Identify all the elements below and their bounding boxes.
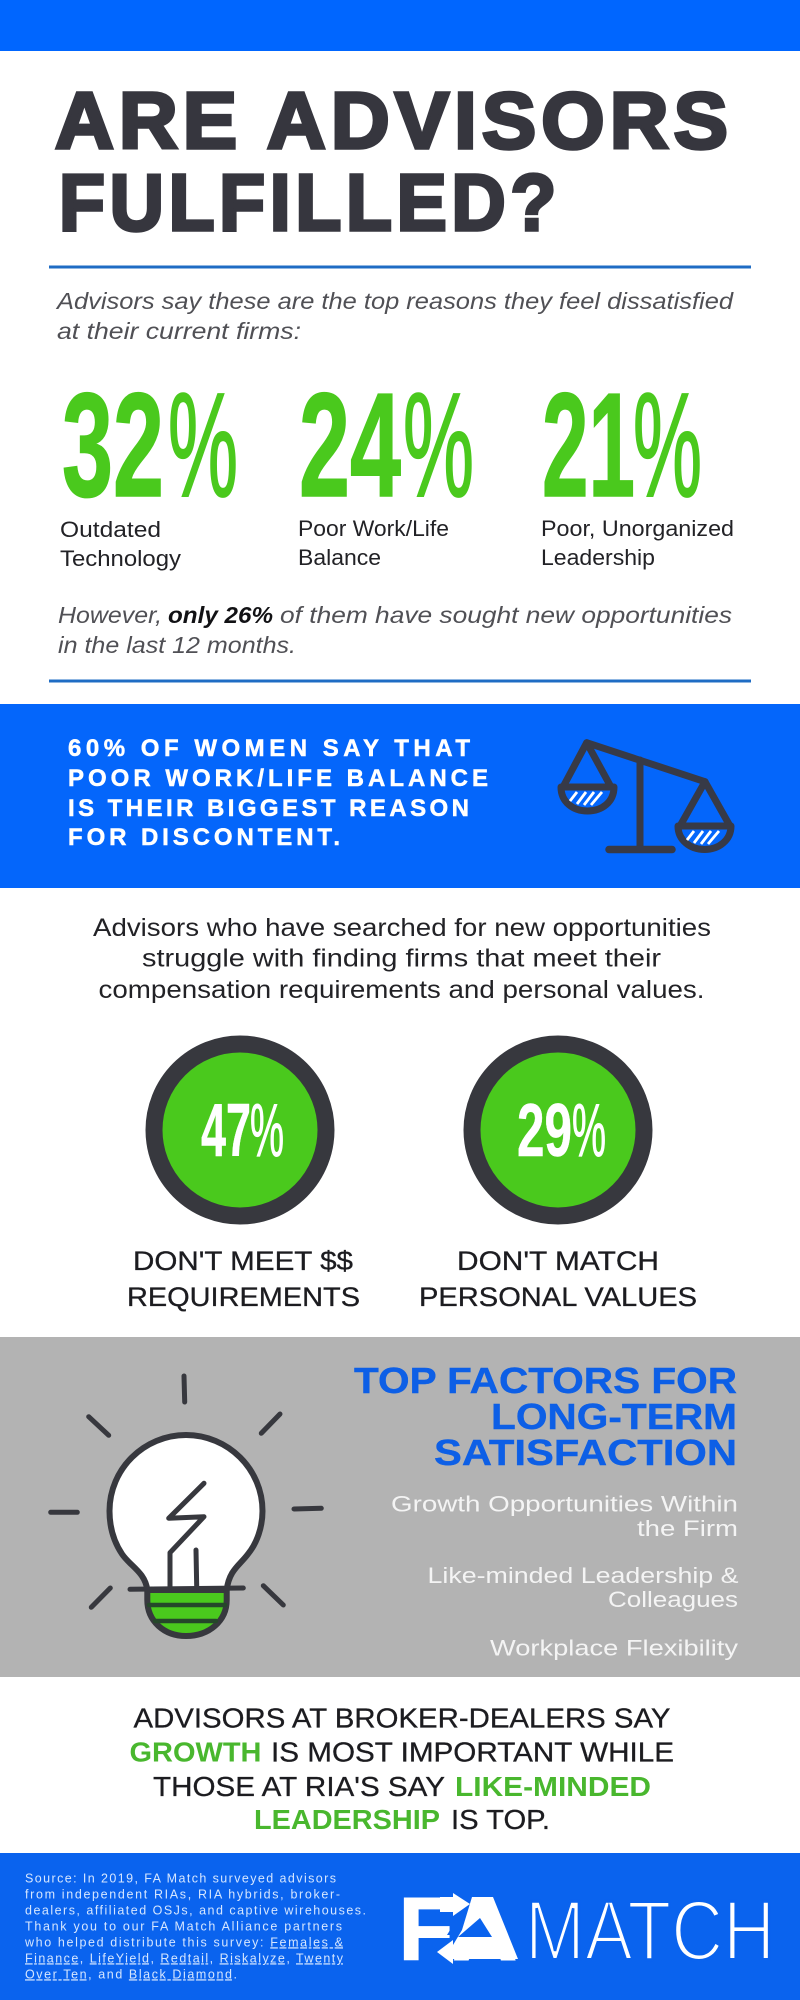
broker-dealers statement: LIKE-MINDED (455, 1771, 651, 1802)
broker-dealers statement: ADVISORS AT BROKER-DEALERS SAY (134, 1702, 670, 1734)
searched text: compensation requirements and personal values. (98, 976, 704, 1004)
factor list (391, 1492, 739, 1660)
heading: top factors (354, 1360, 737, 1473)
banner text: POOR WORK/LIFE BALANCE (68, 765, 488, 792)
broker-dealers statement: THOSE AT RIA'S SAY (153, 1771, 445, 1802)
factor list: Growth Opportunities Within (391, 1492, 738, 1516)
label: don't meet requirements (127, 1246, 360, 1312)
searched text: struggle with finding firms that meet their (142, 944, 661, 972)
logo arrows and A counter (437, 1893, 518, 1964)
broker-dealers statement: GROWTH (130, 1736, 262, 1768)
banner text: IS THEIR BIGGEST REASON (68, 795, 469, 822)
however text (58, 602, 733, 658)
however text: However, (58, 602, 162, 628)
searched text (93, 914, 711, 1004)
stat: 21% poor, unorganized leadership: % (633, 363, 702, 528)
stat: 32% outdated technology: 32 (62, 363, 164, 528)
source note: from independent RIAs, RIA hybrids, broker- (25, 1887, 340, 1901)
label: don't match personal values: DON'T MATCH (457, 1246, 659, 1276)
source note: Finance, LifeYield, Redtail, Riskalyze, Twenty (25, 1951, 344, 1965)
source note: who helped distribute this survey: Females & (24, 1935, 344, 1949)
searched text: Advisors who have searched for new opportunities (93, 914, 711, 942)
stat circle: 47% (154, 1044, 326, 1216)
stat: 21% poor, unorganized leadership: Poor, Unorganized (541, 516, 734, 541)
icon: light bulb (51, 1376, 321, 1636)
stat: 24% poor work/life balance: Balance (298, 545, 381, 570)
stat: 32% outdated technology: Technology (60, 546, 181, 571)
stat: 21% poor, unorganized leadership: Leadership (541, 545, 655, 570)
broker-dealers statement (130, 1702, 674, 1835)
stat: 24% poor work/life balance: % (403, 363, 474, 528)
stat circle: 29%: 29 (517, 1088, 572, 1172)
intro text: Advisors say these are the top reasons they feel dissatisfied (55, 288, 734, 314)
panel: top factors (0, 1337, 800, 1677)
broker-dealers statement: LEADERSHIP (254, 1804, 440, 1835)
panel: women banner (0, 704, 800, 888)
logo: FA Match (399, 1879, 775, 1978)
stat: 24% poor work/life balance: Poor Work/Life (298, 516, 449, 541)
broker-dealers statement: IS TOP. (451, 1804, 550, 1835)
factor list: Workplace Flexibility (490, 1636, 739, 1660)
intro text: at their current firms: (57, 318, 301, 344)
however text: in the last 12 months. (58, 632, 296, 658)
stat circle: 29%: % (572, 1088, 606, 1172)
factor list: Like-minded Leadership & (428, 1563, 738, 1588)
top blue band (0, 0, 800, 51)
stat circle: 47%: % (250, 1088, 284, 1172)
source note (24, 1871, 366, 1981)
title (55, 76, 733, 247)
stat: 21% poor, unorganized leadership (541, 363, 734, 570)
stat: 24% poor work/life balance: 24 (299, 363, 401, 528)
banner text: FOR DISCONTENT. (68, 824, 340, 851)
label: don't match personal values: PERSONAL VALUES (419, 1282, 697, 1312)
factor list: the Firm (637, 1516, 738, 1541)
banner text: 60% OF WOMEN SAY THAT (68, 735, 470, 762)
heading: top factors: SATISFACTION (434, 1432, 737, 1473)
heading: top factors: TOP FACTORS FOR (354, 1360, 737, 1401)
source note: Thank you to our FA Match Alliance partners (25, 1919, 342, 1933)
logo: FA Match: F (399, 1879, 453, 1978)
icon: balance scale (561, 743, 731, 850)
label: don't meet requirements: REQUIREMENTS (127, 1282, 360, 1312)
source note: Source: In 2019, FA Match surveyed advisors (25, 1871, 336, 1885)
panel: footer (0, 1853, 800, 2000)
however text: of them have sought new opportunities (280, 602, 733, 628)
stat circle: 29% (472, 1044, 644, 1216)
logo: FA Match: A (453, 1879, 517, 1978)
label: don't match personal values (419, 1246, 697, 1312)
broker-dealers statement: IS MOST IMPORTANT WHILE (271, 1736, 674, 1768)
label: don't meet requirements: DON'T MEET $$ (133, 1246, 353, 1276)
heading: top factors: LONG-TERM (491, 1396, 737, 1437)
title: ARE ADVISORS (55, 76, 733, 165)
stat: 32% outdated technology: Outdated (60, 517, 161, 542)
title: FULFILLED? (59, 158, 561, 247)
stat: 21% poor, unorganized leadership: 21 (542, 363, 635, 528)
source note: Over Ten, and Black Diamond. (25, 1967, 237, 1981)
source note: dealers, affiliated OSJs, and captive wirehouses. (25, 1903, 366, 1917)
banner text (68, 735, 488, 851)
stat: 32% outdated technology: % (168, 363, 238, 528)
factor list: Colleagues (608, 1587, 738, 1612)
intro text (55, 288, 734, 344)
however text: only 26% (168, 602, 273, 628)
stat circle: 47%: 47 (201, 1088, 251, 1172)
